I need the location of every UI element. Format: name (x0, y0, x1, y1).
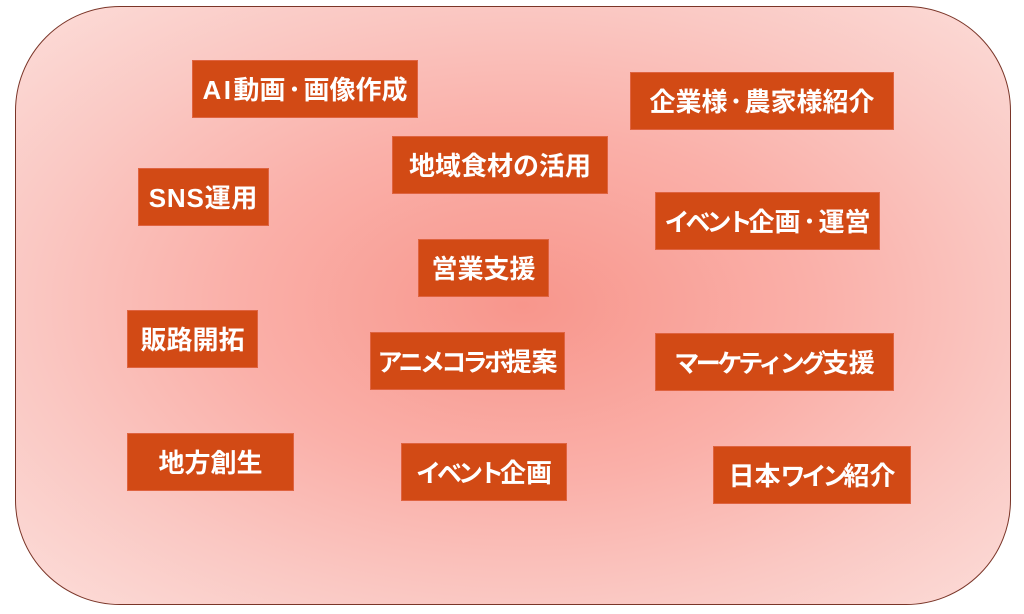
label: 地方創生: 地方創生 (158, 448, 262, 478)
label: イベント企画: イベント企画 (416, 458, 552, 488)
label: 地域食材の活用 (392, 136, 608, 194)
label: 地域食材の活用: 地域食材の活用 (409, 151, 591, 181)
label: 販路開拓 (127, 310, 258, 368)
label: 企業様・農家様紹介 (630, 72, 894, 130)
label: 日本ワイン紹介 (713, 446, 911, 504)
label: AI動画・画像作成 (192, 60, 418, 118)
label: AI動画・画像作成: AI動画 画像作成 (202, 75, 408, 105)
label: マーケティング支援: マーケティング支援 (674, 348, 875, 378)
label: イベント企画 (401, 443, 567, 501)
label: SNS運用: SNS運用 (149, 183, 258, 213)
label: イベント企画・運営: ･ (803, 207, 816, 237)
label: 日本ワイン紹介: 日本ワイン紹介 (728, 461, 896, 491)
label: SNS運用 (138, 168, 269, 226)
label: イベント企画・運営 (655, 192, 880, 250)
label: アニメコラボ提案: アニメコラボ提案 (378, 347, 557, 377)
label: アニメコラボ提案 (370, 332, 565, 390)
label: 地方創生 (127, 433, 294, 491)
label: マーケティング支援 (655, 333, 894, 391)
label: イベント企画・運営: イベント企画 運営 (664, 207, 871, 237)
label: 営業支援: 営業支援 (431, 254, 536, 284)
label: AI動画・画像作成: ･ (288, 75, 301, 105)
label: 販路開拓: 販路開拓 (140, 325, 244, 355)
label: 企業様・農家様紹介: ･ (729, 87, 742, 117)
label: 営業支援 (418, 239, 549, 297)
label: 企業様・農家様紹介: 企業様 農家様紹介 (649, 87, 875, 117)
